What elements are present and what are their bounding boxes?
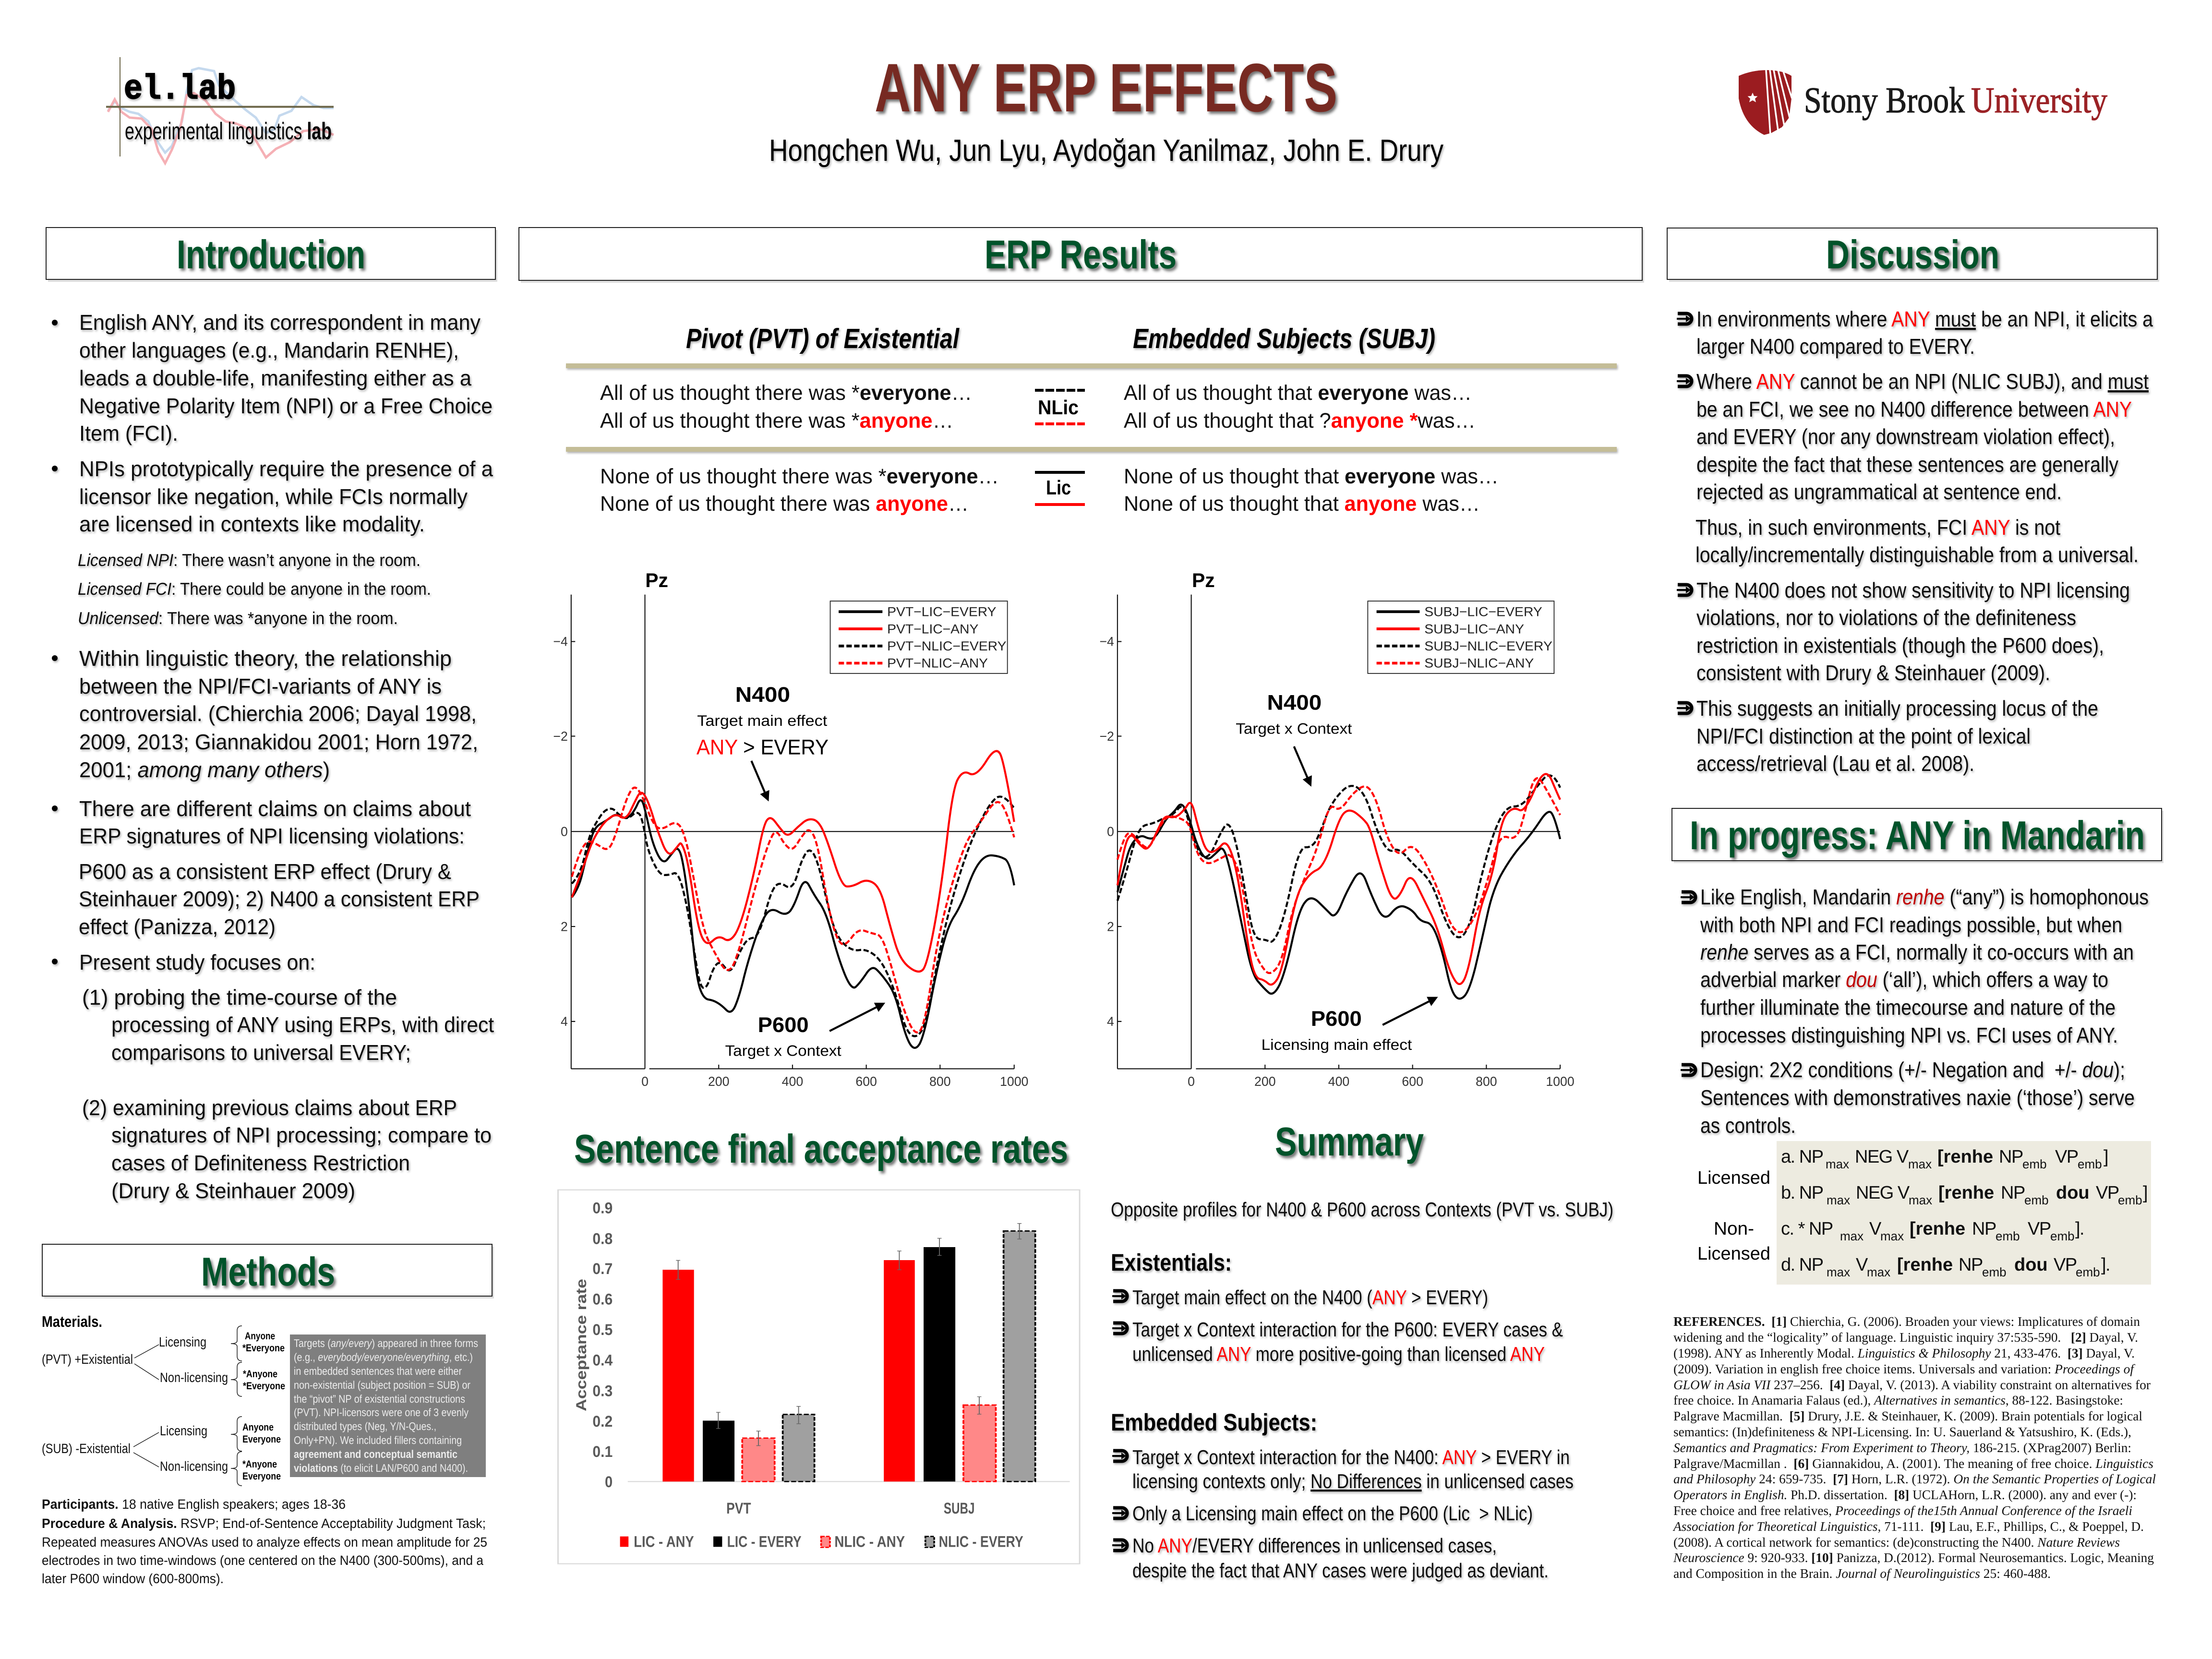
panel: ERP results (519, 228, 1644, 1089)
bar chart: 0.4 (592, 1351, 613, 1369)
gray note box: (PVT). NPI-licensors were one of 3 evenly (294, 1406, 469, 1419)
bar chart: 0.3 (592, 1382, 613, 1400)
chart: SUBJ ERP waveform: Target x Context (1236, 721, 1352, 737)
chart: PVT ERP waveform: 4 (561, 1015, 568, 1029)
discussion text: and EVERY (nor any downstream violation effect), (1696, 424, 2115, 449)
discussion text: violations, nor to violations of the definiteness (1696, 605, 2076, 630)
references: semantics: (In)definiteness & NPI-Licensing. In: U. Sauerland & Yatsushiro, K. (Eds.), (1673, 1424, 2131, 1439)
condition table: All of us thought there was *anyone… (600, 409, 953, 433)
summary text (1111, 1198, 1613, 1582)
title: ANY ERP EFFECTS (875, 50, 1337, 126)
materials tree diagram: (PVT) +Existential (42, 1352, 133, 1367)
heading: Discussion (1667, 228, 2159, 282)
materials tree diagram: Non-licensing (160, 1459, 228, 1474)
Mandarin conditions table: Non- (1714, 1219, 1754, 1239)
gray note box: Only+PN). We included fillers containing (294, 1434, 462, 1446)
materials tree diagram: (SUB) -Existential (42, 1441, 131, 1456)
condition table: Pivot (PVT) of Existential (686, 323, 960, 354)
Mandarin conditions table: ] (2143, 1183, 2147, 1203)
chart: PVT ERP waveform: 800 (929, 1075, 951, 1089)
discussion text: Thus, in such environments, FCI ANY is not (1695, 515, 2060, 540)
discussion text: locally/incrementally distinguishable from a universal. (1695, 542, 2139, 567)
discussion text: access/retrieval (Lau et al. 2008). (1696, 751, 1974, 776)
Mandarin conditions table: emb (2076, 1265, 2100, 1279)
chart: PVT ERP waveform (553, 569, 1028, 1089)
bar chart: SUBJ (944, 1500, 974, 1517)
discussion text: consistent with Drury & Steinhauer (2009). (1696, 661, 2050, 685)
chart: PVT ERP waveform: PVT−LIC−ANY (887, 622, 978, 637)
Mandarin conditions table: max (1908, 1157, 1932, 1171)
gray note box: violations (to elicit LAN/P600 and N400). (294, 1462, 468, 1474)
chart: SUBJ ERP waveform: 400 (1328, 1075, 1349, 1089)
introduction text: effect (Panizza, 2012) (79, 914, 276, 939)
Mandarin conditions table: max (1827, 1193, 1850, 1207)
heading: ERP Results (519, 228, 1644, 283)
Mandarin conditions table: NP (1972, 1219, 1996, 1239)
bar chart: PVT (726, 1500, 751, 1517)
condition table: Embedded Subjects (SUBJ) (1133, 323, 1435, 354)
references: widening and the “logicality” of language. Linguistic inquiry 37:535-590. [2] Dayal, V. (1673, 1330, 2138, 1345)
chart: SUBJ ERP waveform (1099, 569, 1575, 1089)
discussion text: rejected as ungrammatical at sentence end. (1696, 480, 2062, 504)
Mandarin text: Design: 2X2 conditions (+/- Negation and +/- dou); (1700, 1058, 2125, 1082)
chart: PVT ERP waveform: PVT−NLIC−ANY (887, 656, 988, 671)
references: (1998). ANY as Inherently Modal. Linguistics & Philosophy 21, 433-476. [3] Dayal, V. (1673, 1346, 2135, 1360)
chart: SUBJ ERP waveform: 0 (1188, 1075, 1195, 1089)
participants and procedure text: electrodes in two time-windows (one centered on the N400 (300-500ms), and a (42, 1553, 483, 1568)
participants and procedure text: Procedure & Analysis. RSVP; End-of-Sentence Acceptability Judgment Task; (42, 1516, 486, 1531)
bar chart (558, 1190, 1080, 1564)
introduction text: Within linguistic theory, the relationship (79, 646, 452, 671)
Mandarin text: Sentences with demonstratives naxie (‘those’) serve (1700, 1085, 2135, 1110)
logo: Stony Brook University (1739, 70, 2107, 135)
Mandarin conditions table: emb (2050, 1229, 2075, 1243)
chart: SUBJ ERP waveform: Licensing main effect (1262, 1036, 1412, 1053)
Mandarin text: adverbial marker dou (‘all’), which offers a way to (1700, 967, 2108, 992)
summary text: unlicensed ANY more positive-going than licensed ANY (1132, 1343, 1545, 1365)
materials tree diagram: *Anyone (243, 1369, 277, 1380)
introduction text: 2001; among many others) (79, 757, 330, 782)
materials tree diagram: Anyone (242, 1422, 274, 1433)
materials tree diagram: Licensing (160, 1423, 207, 1438)
participants and procedure text: later P600 window (600-800ms). (42, 1571, 224, 1586)
chart: SUBJ ERP waveform: SUBJ−LIC−ANY (1424, 622, 1524, 637)
materials tree diagram: Everyone (242, 1434, 281, 1445)
introduction text: licensor like negation, while FCIs normally (79, 484, 468, 509)
chart: SUBJ ERP waveform: SUBJ−LIC−EVERY (1424, 605, 1542, 619)
bar chart: NLIC - ANY (834, 1533, 905, 1550)
discussion text: NPI/FCI distinction at the point of lexical (1696, 724, 2031, 748)
Mandarin conditions table: Licensed (1697, 1244, 1770, 1264)
discussion text: Where ANY cannot be an NPI (NLIC SUBJ), and must (1696, 369, 2149, 394)
introduction text: English ANY, and its correspondent in many (79, 310, 481, 335)
chart: SUBJ ERP waveform: 200 (1254, 1075, 1276, 1089)
Mandarin conditions table: dou (2056, 1183, 2090, 1203)
chart: PVT ERP waveform: P600 (758, 1013, 809, 1037)
logo: Stony Brook University: Stony Brook (1804, 80, 1965, 120)
gray note box: (e.g., everybody/everyone/everything, etc.) (294, 1351, 473, 1363)
chart: PVT ERP waveform: 1000 (1000, 1075, 1028, 1089)
references: and Composition in the Brain. Journal of Neurolinguistics 25: 460-488. (1673, 1566, 2051, 1581)
logo: el.lab (106, 57, 334, 163)
references: and Philosophy 24: 659-735. [7] Horn, L.R. (1972). On the Semantic Properties of Logical (1673, 1471, 2156, 1486)
references: Palgrave Macmillan. [5] Drury, J.E. & Steinhauer, K. (2009). Brain potentials for logical (1673, 1408, 2142, 1423)
chart: PVT ERP waveform: 200 (708, 1075, 729, 1089)
summary text: Target x Context interaction for the P600: EVERY cases & (1132, 1318, 1563, 1341)
materials tree diagram: Everyone (242, 1471, 281, 1482)
chart: PVT ERP waveform: 2 (561, 920, 568, 934)
heading: ERP Results: ERP Results (985, 232, 1177, 277)
materials tree diagram: Anyone (245, 1331, 275, 1342)
discussion text: The N400 does not show sensitivity to NPI licensing (1696, 578, 2130, 602)
references (1672, 1314, 2156, 1581)
introduction text: NPIs prototypically require the presence of a (79, 457, 493, 481)
gray note box: Targets (any/every) appeared in three forms (294, 1337, 478, 1349)
Mandarin conditions table: max (1867, 1265, 1890, 1279)
introduction text: (Drury & Steinhauer 2009) (111, 1178, 355, 1203)
bar chart: 0.8 (592, 1230, 613, 1248)
references: (2008). A cortical network for semantics: (de)constructing the N400. Nature Reviews (1673, 1535, 2120, 1550)
Mandarin conditions table: max (1909, 1193, 1932, 1207)
heading: Introduction: Introduction (177, 232, 365, 277)
bar chart: LIC - ANY (634, 1533, 694, 1550)
Mandarin conditions table: max (1826, 1157, 1849, 1171)
Mandarin text: processes distinguishing NPI vs. FCI uses of ANY. (1700, 1023, 2118, 1047)
chart: PVT ERP waveform: 400 (782, 1075, 803, 1089)
gray note box (290, 1334, 486, 1477)
Mandarin conditions table: ] (2104, 1147, 2108, 1167)
references: Operators in English. Ph.D. dissertation. [8] UCLAHorn, L.R. (2000). any and ever (-): (1673, 1487, 2137, 1502)
Mandarin text (1681, 885, 2149, 1138)
materials tree diagram: Non-licensing (160, 1370, 228, 1385)
introduction text: Steinhauer 2009); 2) N400 a consistent ERP (79, 887, 480, 911)
logo: el.lab: experimental linguistics lab (125, 118, 332, 144)
discussion text: In environments where ANY must be an NPI, it elicits a (1696, 307, 2153, 331)
Mandarin conditions table: NP (1999, 1147, 2023, 1167)
introduction text (52, 310, 494, 1203)
Mandarin conditions table: max (1827, 1265, 1850, 1279)
Mandarin conditions table: NEG V (1856, 1183, 1910, 1203)
Mandarin conditions table: max (1840, 1229, 1863, 1243)
materials tree diagram: Licensing (159, 1334, 206, 1349)
bar chart: 0.1 (592, 1443, 613, 1460)
bar chart: 0.5 (592, 1321, 613, 1338)
chart: SUBJ ERP waveform: N400 (1267, 691, 1322, 715)
Mandarin conditions table: emb (2024, 1193, 2049, 1207)
Mandarin conditions table: VP (2055, 1147, 2078, 1167)
chart: SUBJ ERP waveform: −2 (1099, 729, 1114, 744)
discussion text: be an FCI, we see no N400 difference between ANY (1696, 397, 2132, 421)
chart: SUBJ ERP waveform: Pz (1192, 569, 1215, 591)
panel: in progress ANY in Mandarin (1672, 808, 2164, 1285)
Mandarin conditions table: ]. (2075, 1219, 2084, 1239)
chart: SUBJ ERP waveform: 800 (1476, 1075, 1497, 1089)
condition table: All of us thought that everyone was… (1124, 381, 1472, 405)
logo: Stony Brook University: University (1971, 80, 2107, 120)
chart: SUBJ ERP waveform: 1000 (1546, 1075, 1575, 1089)
introduction text: between the NPI/FCI-variants of ANY is (79, 674, 442, 698)
references: GLOW in Asia VII 237–256. [4] Dayal, V. (2013). A viability constraint on alternatives for (1673, 1377, 2151, 1392)
chart: SUBJ ERP waveform: 2 (1107, 920, 1114, 934)
Mandarin conditions table: c. * NP (1781, 1219, 1833, 1239)
chart: PVT ERP waveform: −2 (553, 729, 568, 744)
gray note box: distributed types (Neg, Y/N-Ques., (294, 1420, 436, 1432)
introduction text: Licensed NPI: There wasn’t anyone in the room. (78, 550, 421, 570)
Mandarin conditions table: d. NP (1781, 1255, 1823, 1275)
Mandarin conditions table: [renhe (1910, 1219, 1965, 1239)
introduction text: (2) examining previous claims about ERP (82, 1095, 457, 1120)
participants and procedure text: Repeated measures ANOVAs used to analyze effects on mean amplitude for 25 (42, 1535, 487, 1550)
introduction text: P600 as a consistent ERP effect (Drury & (79, 859, 451, 884)
Mandarin conditions table: max (1880, 1229, 1904, 1243)
condition table: NLic (1038, 396, 1079, 419)
condition table: All of us thought that ?anyone *was… (1124, 409, 1476, 433)
introduction text: other languages (e.g., Mandarin RENHE), (79, 338, 459, 362)
materials tree diagram: *Everyone (243, 1381, 285, 1392)
Mandarin conditions table: [renhe (1937, 1147, 1993, 1167)
chart: PVT ERP waveform: 600 (855, 1075, 877, 1089)
summary text: licensing contexts only; No Differences in unlicensed cases (1132, 1470, 1574, 1492)
chart: PVT ERP waveform: Pz (645, 569, 668, 591)
chart: PVT ERP waveform: PVT−LIC−EVERY (887, 605, 997, 619)
bar chart: NLIC - EVERY (939, 1533, 1023, 1550)
panel: sentence final acceptance rates (558, 1126, 1080, 1564)
Mandarin conditions table (1697, 1141, 2151, 1285)
bar chart: 0.2 (592, 1413, 613, 1430)
materials tree diagram: Materials. (42, 1313, 102, 1330)
Mandarin conditions table: NP (1959, 1255, 1983, 1275)
Mandarin text: Like English, Mandarin renhe (“any”) is homophonous (1700, 885, 2149, 909)
chart: PVT ERP waveform: PVT−NLIC−EVERY (887, 639, 1007, 653)
introduction text: processing of ANY using ERPs, with direct (111, 1012, 494, 1037)
references: Neuroscience 9: 920-933. [10] Panizza, D.(2012). Formal Neurosemantics. Logic, Meaning (1673, 1550, 2154, 1565)
y axis title: Acceptance rate (574, 1279, 589, 1411)
introduction text: Item (FCI). (79, 421, 178, 445)
condition table: None of us thought that anyone was… (1124, 492, 1480, 516)
bar chart: LIC - EVERY (727, 1533, 801, 1550)
bar chart: 0.7 (592, 1260, 613, 1277)
chart: PVT ERP waveform: 0 (641, 1075, 649, 1089)
introduction text: controversial. (Chierchia 2006; Dayal 1998, (79, 701, 477, 726)
introduction text: comparisons to universal EVERY; (111, 1040, 411, 1065)
references: Free choice and free relatives, Proceedings of the15th Annual Conference of the Israeli (1673, 1503, 2132, 1518)
gray note box: the “pivot” NP of existential constructions (294, 1393, 465, 1405)
Mandarin conditions table: emb (1996, 1229, 2020, 1243)
chart: PVT ERP waveform: 0 (561, 825, 568, 839)
panel: discussion (1667, 228, 2159, 776)
Mandarin conditions table: a. NP (1781, 1147, 1823, 1167)
discussion text: restriction in existentials (though the P600 does), (1696, 633, 2104, 658)
summary text: Only a Licensing main effect on the P600 (Lic > NLic) (1132, 1502, 1533, 1525)
introduction text: There are different claims on claims about (79, 796, 471, 821)
summary text: No ANY/EVERY differences in unlicensed cases, (1132, 1534, 1497, 1557)
materials tree diagram: *Anyone (242, 1459, 277, 1470)
condition table: None of us thought there was *everyone… (600, 465, 999, 488)
introduction text: Unlicensed: There was *anyone in the room. (78, 608, 398, 628)
chart: PVT ERP waveform: Target main effect (697, 712, 827, 729)
condition table: None of us thought there was anyone… (600, 492, 969, 516)
introduction text: Present study focuses on: (79, 950, 315, 974)
heading: Discussion: Discussion (1826, 232, 1999, 277)
summary text: Target main effect on the N400 (ANY > EVERY) (1132, 1286, 1488, 1309)
gray note box: in embedded sentences that were either (294, 1365, 462, 1377)
gray note box: agreement and conceptual semantic (294, 1448, 457, 1460)
chart: SUBJ ERP waveform: P600 (1311, 1007, 1362, 1031)
references: (2009). Variation in english free choice items. Universals and variation: Proceedings of (1673, 1361, 2135, 1376)
introduction text: Licensed FCI: There could be anyone in the room. (78, 579, 431, 599)
Mandarin conditions table: emb (2078, 1157, 2102, 1171)
chart: PVT ERP waveform: −4 (553, 635, 568, 649)
chart: SUBJ ERP waveform: 4 (1107, 1015, 1114, 1029)
summary text: Opposite profiles for N400 & P600 across Contexts (PVT vs. SUBJ) (1111, 1198, 1613, 1221)
discussion text: This suggests an initially processing locus of the (1696, 696, 2098, 721)
heading: Methods (42, 1244, 494, 1298)
summary text: Target x Context interaction for the N400: ANY > EVERY in (1132, 1446, 1570, 1468)
Mandarin conditions table: dou (2014, 1255, 2048, 1275)
Mandarin conditions table: b. NP (1781, 1183, 1823, 1203)
references: Semantics and Pragmatics: From Experiment to Theory, 186-215. (XPrag2007) Berlin: (1673, 1440, 2131, 1455)
references: REFERENCES. [1] Chierchia, G. (2006). Broaden your views: Implicatures of domain (1673, 1314, 2140, 1329)
Mandarin conditions table: Licensed (1697, 1168, 1770, 1188)
chart: SUBJ ERP waveform: 600 (1402, 1075, 1423, 1089)
bar chart: 0.6 (592, 1290, 613, 1308)
condition table: All of us thought there was *everyone… (600, 381, 972, 405)
chart: SUBJ ERP waveform: SUBJ−NLIC−ANY (1424, 656, 1534, 671)
bar chart: 0 (605, 1473, 613, 1491)
chart: PVT ERP waveform: N400 (735, 683, 790, 707)
chart: SUBJ ERP waveform: 0 (1107, 825, 1114, 839)
summary text: Embedded Subjects: (1111, 1409, 1317, 1436)
Mandarin conditions table: VP (2096, 1183, 2119, 1203)
Mandarin conditions table: VP (2054, 1255, 2077, 1275)
materials tree diagram (42, 1313, 285, 1486)
logo: el.lab: el.lab (124, 70, 236, 109)
summary text: despite the fact that ANY cases were judged as deviant. (1132, 1559, 1549, 1582)
introduction text: ERP signatures of NPI licensing violations: (79, 824, 465, 848)
introduction text: are licensed in contexts like modality. (79, 512, 425, 536)
Mandarin conditions table: V (1856, 1255, 1868, 1275)
Mandarin text: renhe serves as a FCI, normally it co-occurs with an (1700, 940, 2134, 964)
condition table: Lic (1046, 476, 1071, 499)
heading: Summary: Summary (1275, 1119, 1424, 1164)
discussion text: despite the fact that these sentences are generally (1696, 452, 2118, 477)
Mandarin conditions table: ]. (2101, 1255, 2110, 1275)
Mandarin text: with both NPI and FCI readings possible, but when (1700, 913, 2122, 937)
introduction text: cases of Definiteness Restriction (111, 1151, 410, 1175)
Mandarin text: further illuminate the timecourse and nature of the (1700, 995, 2116, 1020)
heading: Sentence final acceptance rates: Sentence final acceptance rates (574, 1126, 1068, 1171)
introduction text: 2009, 2013; Giannakidou 2001; Horn 1972, (79, 730, 478, 754)
chart: PVT ERP waveform: Target x Context (725, 1042, 842, 1059)
Mandarin conditions table: VP (2028, 1219, 2051, 1239)
introduction text: Negative Polarity Item (NPI) or a Free Choice (79, 394, 493, 418)
condition table: None of us thought that everyone was… (1124, 465, 1499, 488)
chart: SUBJ ERP waveform: SUBJ−NLIC−EVERY (1424, 639, 1552, 653)
gray note box: non-existential (subject position = SUB) or (294, 1379, 470, 1391)
authors: Hongchen Wu, Jun Lyu, Aydoğan Yanilmaz, John E. Drury (769, 133, 1443, 168)
introduction text: signatures of NPI processing; compare to (111, 1123, 492, 1147)
introduction text: leads a double-life, manifesting either as a (79, 366, 472, 390)
participants and procedure text: Participants. 18 native English speakers; ages 18-36 (42, 1497, 346, 1512)
chart: SUBJ ERP waveform: −4 (1099, 635, 1114, 649)
bar chart: 0.9 (592, 1199, 613, 1217)
Mandarin conditions table: [renhe (1897, 1255, 1953, 1275)
participants and procedure text (42, 1497, 487, 1586)
panel: methods (42, 1244, 494, 1586)
materials tree diagram: *Everyone (242, 1343, 285, 1354)
Mandarin conditions table: emb (2022, 1157, 2047, 1171)
heading: Introduction (46, 228, 497, 282)
Mandarin conditions table: NP (2001, 1183, 2025, 1203)
introduction text: (1) probing the time-course of the (82, 985, 397, 1010)
Mandarin conditions table: NEG V (1855, 1147, 1909, 1167)
panel: introduction (46, 228, 497, 1203)
Mandarin conditions table: emb (2118, 1193, 2142, 1207)
references: free choice. In Anamaria Falaus (ed.), Alternatives in semantics, 88-122. Basingstoke: (1673, 1393, 2123, 1407)
summary text: Existentials: (1111, 1249, 1232, 1276)
references: Palgrave/Macmillan . [6] Giannakidou, A. (2001). The meaning of free choice. Linguistics (1673, 1456, 2153, 1471)
Mandarin text: as controls. (1700, 1113, 1796, 1138)
Mandarin conditions table: V (1869, 1219, 1882, 1239)
discussion text: larger N400 compared to EVERY. (1696, 334, 1975, 359)
discussion text (1677, 307, 2153, 776)
condition table (566, 323, 1617, 516)
panel: summary (1111, 1119, 1613, 1582)
references: Association for Theoretical Linguistics, 71-111. [9] Lau, E.F., Phillips, C., & Poeppel, D. (1672, 1519, 2144, 1534)
Mandarin conditions table: [renhe (1938, 1183, 1994, 1203)
chart: PVT ERP waveform: ANY > EVERY (697, 735, 829, 759)
heading: Methods: Methods (201, 1249, 335, 1294)
Mandarin conditions table: emb (1982, 1265, 2007, 1279)
